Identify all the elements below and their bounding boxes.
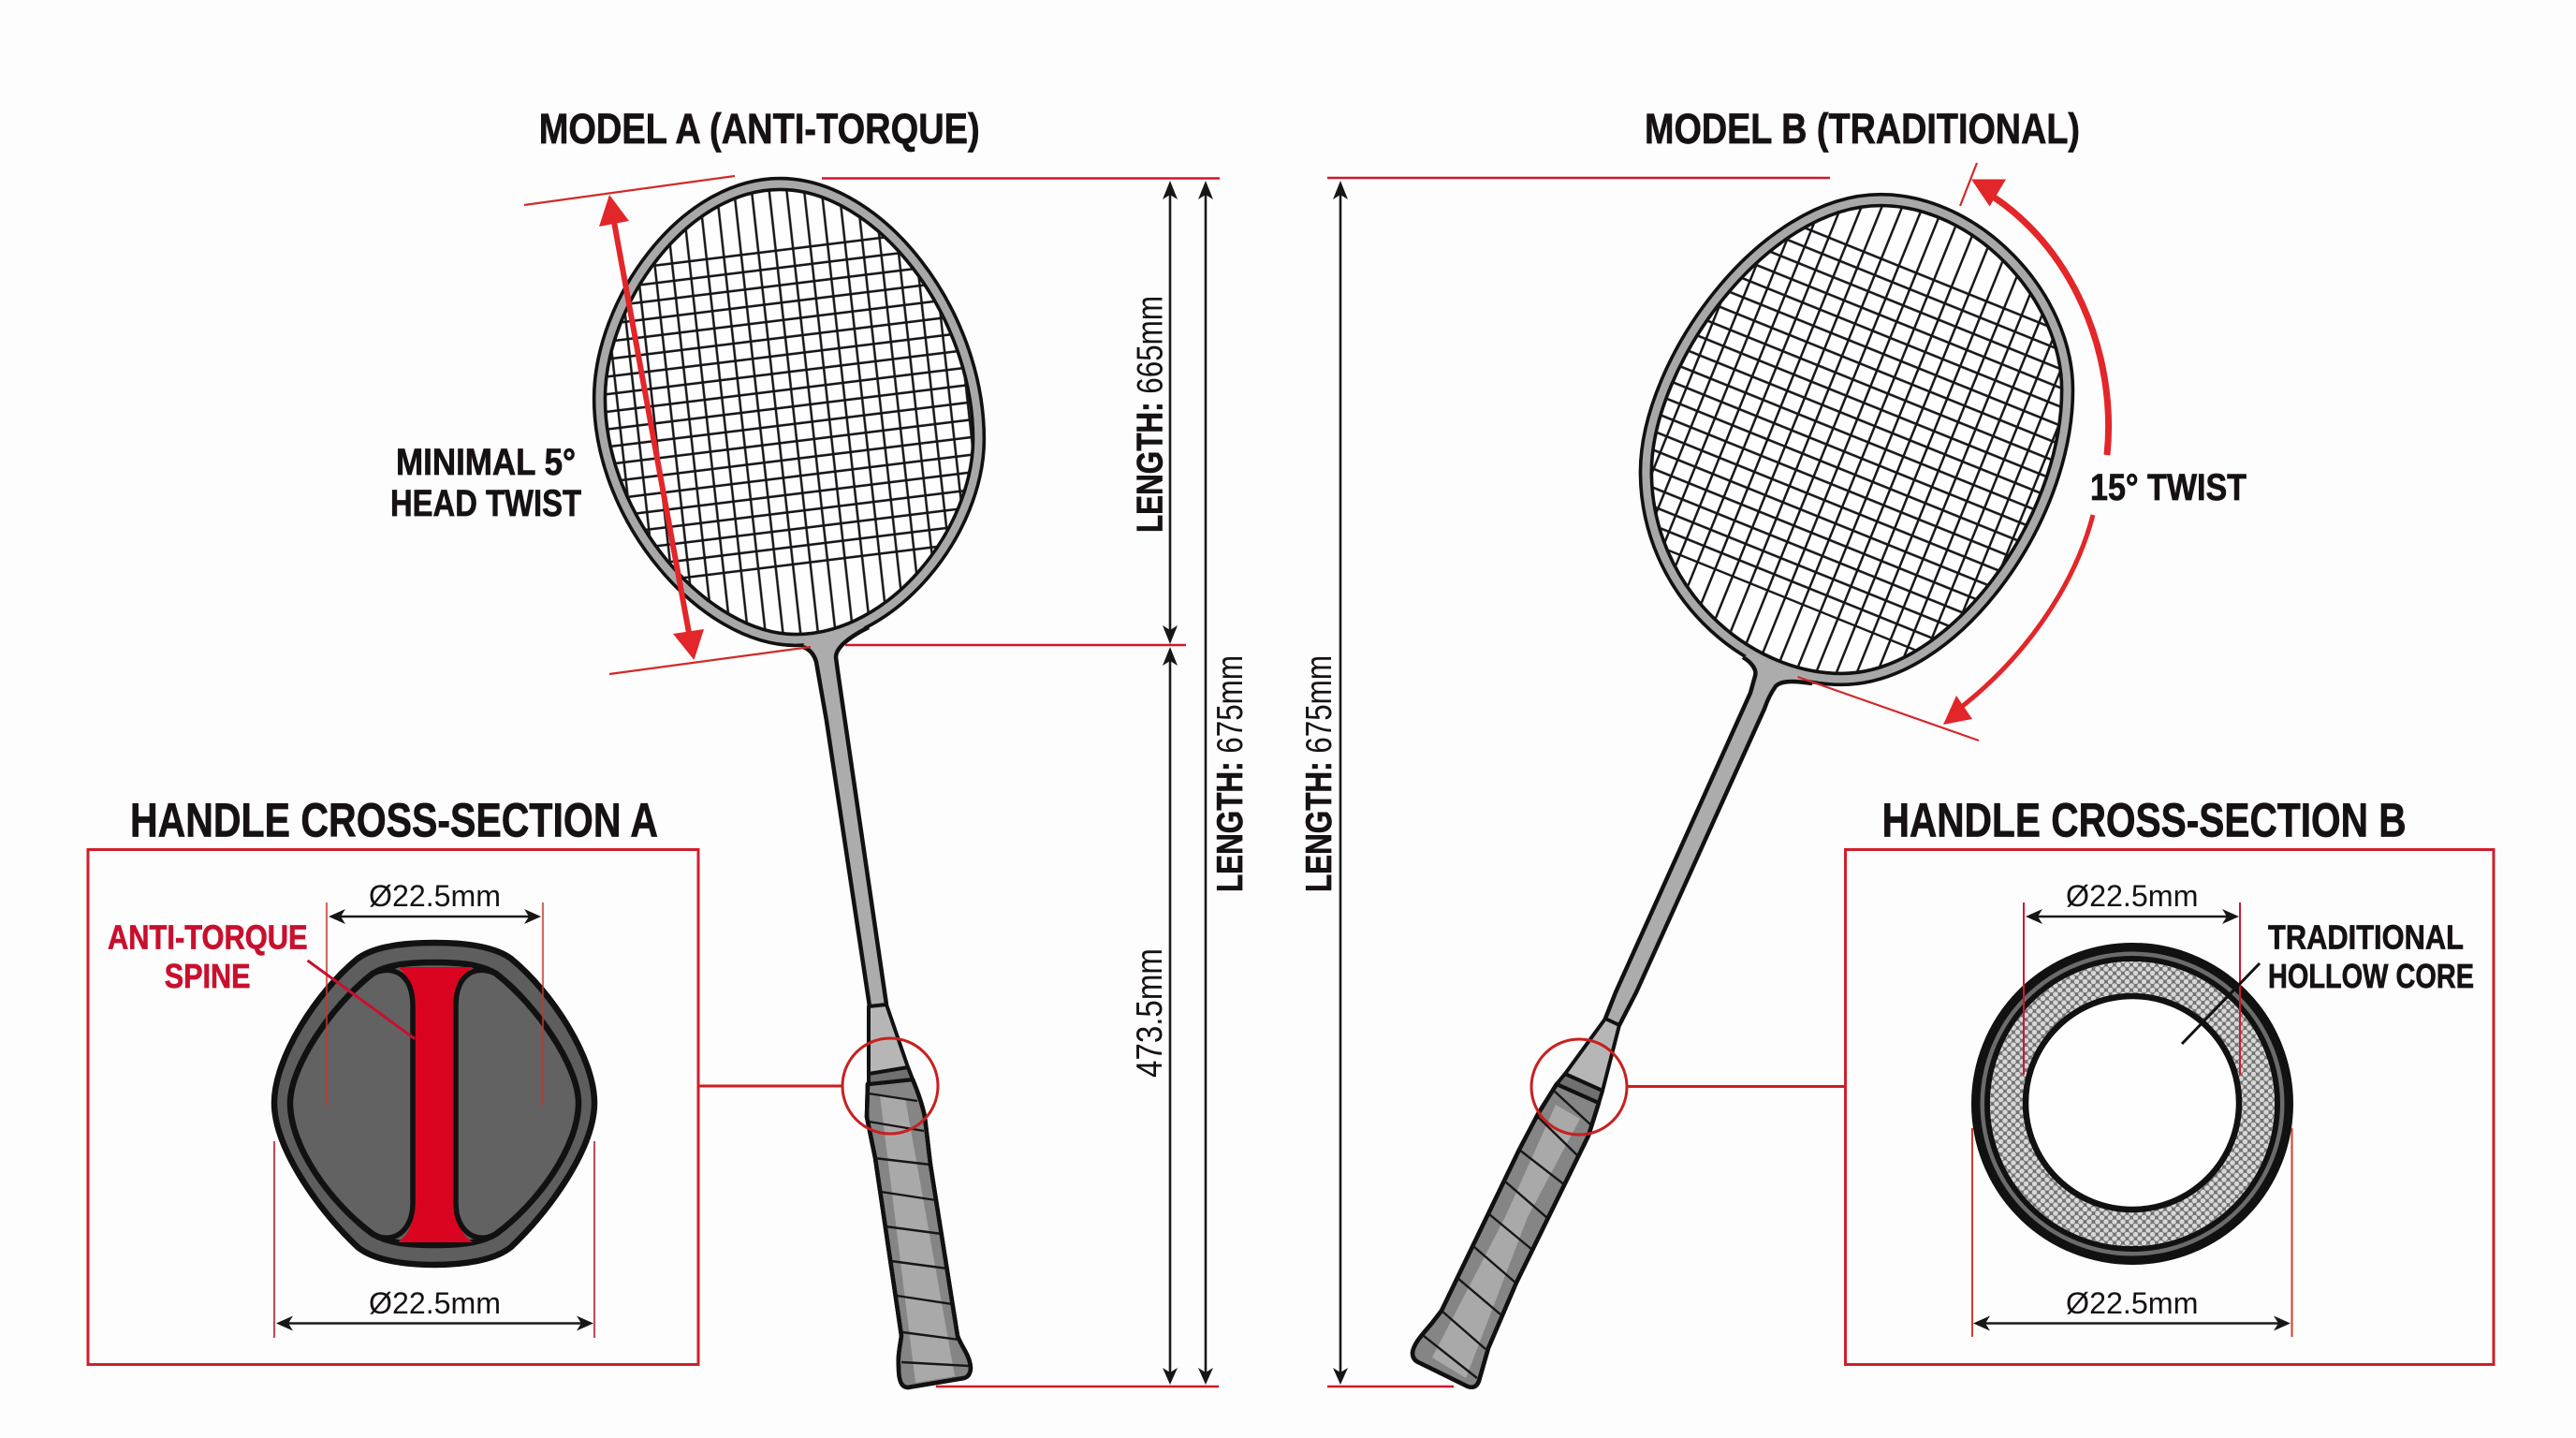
- title: model A: MODEL A (ANTI-TORQUE): [539, 105, 980, 153]
- label: minimal 5 degree head twist: HEAD TWIST: [390, 483, 581, 524]
- racket B head frame: [1639, 193, 2074, 686]
- red double arrow A: [599, 195, 704, 660]
- red arc arrow lower: [1943, 515, 2093, 725]
- callout: anti-torque spine: SPINE: [165, 957, 251, 995]
- head length arrow: [1163, 181, 1178, 644]
- model B length dimension: [1299, 178, 1830, 1387]
- red arc arrow upper: [1971, 180, 2109, 455]
- total length arrow A: [1198, 181, 1213, 1385]
- twist reference lines B: [1797, 163, 1979, 741]
- label: length 665mm: LENGTH: 665mm: [1131, 296, 1170, 533]
- cross-section A body: [274, 943, 594, 1265]
- label: 15 degree twist: 15° TWIST: [2090, 467, 2247, 508]
- red extension lines A: [822, 178, 1220, 1387]
- dimension bottom A: Ø22.5mm: [369, 1286, 501, 1320]
- label: length 675mm B: LENGTH: 675mm: [1299, 655, 1339, 892]
- model A head twist annotation: [390, 176, 811, 674]
- anti-torque spine: [398, 967, 473, 1242]
- racket B shaft: [1605, 653, 1812, 1025]
- twist reference lines A: [524, 176, 811, 674]
- panel B border: [1846, 850, 2494, 1365]
- racket B strings: [1653, 207, 2060, 672]
- panel: handle cross-section B: [1846, 850, 2494, 1365]
- callout: anti-torque spine: ANTI-TORQUE: [108, 918, 308, 957]
- racket A strings: [607, 191, 972, 633]
- red extension lines B: [1327, 178, 1830, 1387]
- dimension top A: [327, 879, 543, 1106]
- racket: model B: [1412, 183, 2087, 1387]
- racket A shaft: [803, 626, 886, 1006]
- label: minimal 5 degree head twist: [390, 442, 581, 524]
- connector: grip callout A: [698, 1038, 938, 1134]
- dimension bottom B: [1972, 1128, 2291, 1337]
- callout: traditional hollow core: HOLLOW CORE: [2268, 957, 2474, 995]
- panel: handle cross-section A: [88, 850, 698, 1365]
- dimension bottom B: Ø22.5mm: [2066, 1286, 2198, 1320]
- panel A border: [88, 850, 698, 1365]
- racket A head frame: [593, 177, 986, 647]
- connector: grip callout B: [1531, 1039, 1846, 1135]
- callout: anti-torque spine: [108, 918, 415, 1039]
- heading: handle cross-section A: HANDLE CROSS-SECTION A: [130, 794, 658, 847]
- dimension top A: Ø22.5mm: [369, 879, 501, 913]
- racket: model A: [580, 169, 1002, 1387]
- model A length dimensions: [822, 178, 1251, 1387]
- racket A grip: [867, 1005, 971, 1387]
- label: length 675mm A: LENGTH: 675mm: [1210, 655, 1251, 892]
- callout: traditional hollow core: TRADITIONAL: [2268, 918, 2464, 957]
- heading: handle cross-section B: HANDLE CROSS-SECTION B: [1882, 794, 2407, 847]
- label: 473.5mm: 473.5mm: [1130, 948, 1170, 1078]
- racket B grip: [1412, 1019, 1619, 1387]
- handle length arrow: [1163, 647, 1178, 1385]
- label: minimal 5 degree head twist: MINIMAL 5°: [396, 442, 576, 483]
- callout: traditional hollow core: [2182, 918, 2474, 1044]
- dimension bottom A: [274, 1141, 594, 1338]
- title: model B: MODEL B (TRADITIONAL): [1645, 105, 2080, 153]
- total length arrow B: [1333, 181, 1348, 1385]
- model B head twist annotation: [1797, 163, 2247, 741]
- dimension top B: Ø22.5mm: [2066, 879, 2198, 913]
- cross-section B ring: [1976, 947, 2289, 1260]
- dimension top B: [2024, 879, 2240, 1075]
